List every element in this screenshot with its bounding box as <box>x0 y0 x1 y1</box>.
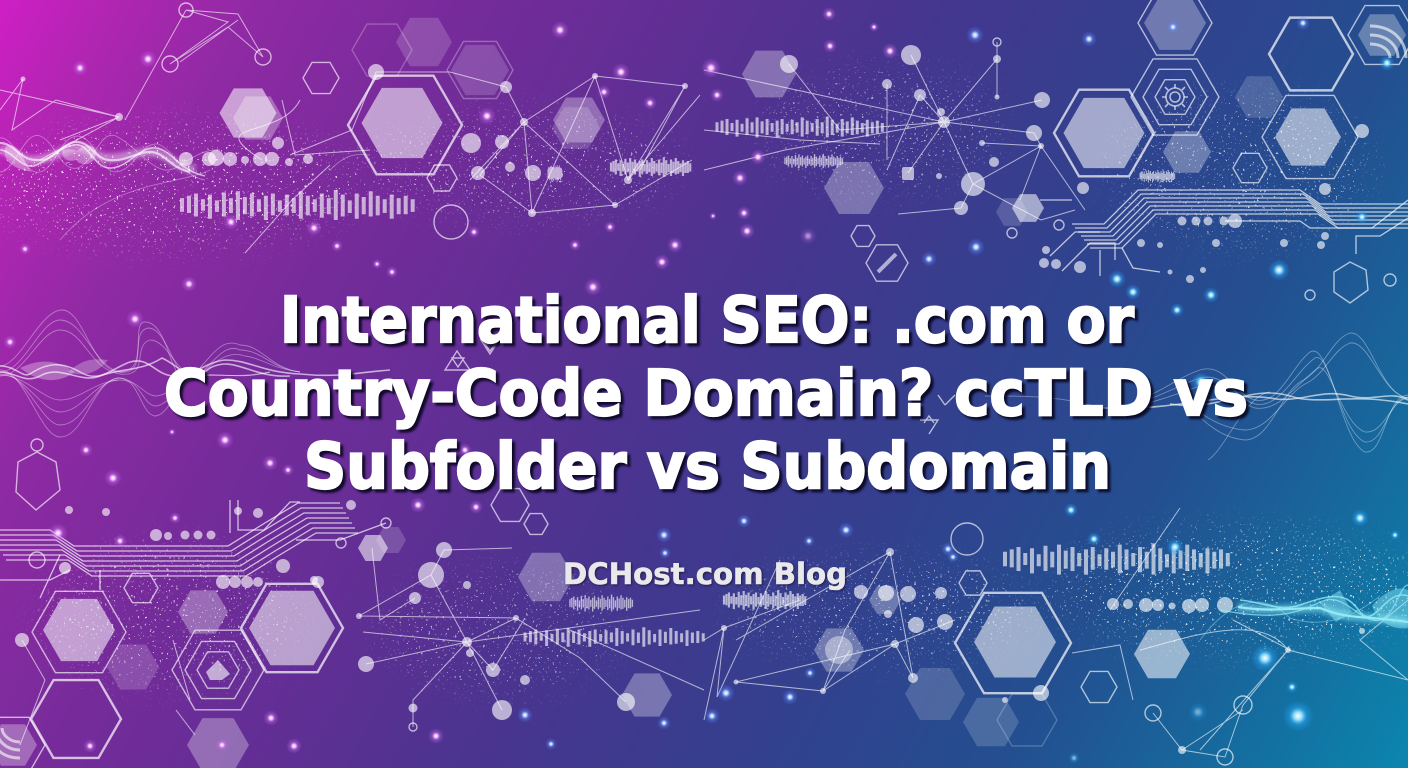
bottom-right energy wave <box>1200 585 1408 640</box>
icon: bottom-left wifi <box>0 728 20 758</box>
title: Subfolder vs Subdomain <box>304 430 1111 503</box>
icon: bottom-left gem <box>206 660 230 680</box>
icon: tool in hexagon <box>878 254 896 272</box>
subtitle: DCHost.com Blog <box>563 557 847 591</box>
left mid sound wave <box>0 310 390 437</box>
top-right network lines <box>704 42 1085 220</box>
top-right hexagons <box>742 0 1408 281</box>
left circuit traces <box>0 500 386 598</box>
icon: wifi signal <box>1370 26 1406 58</box>
glow lights pink <box>3 7 898 754</box>
top-left energy wave <box>0 135 370 240</box>
title: Country-Code Domain? ccTLD vs <box>164 357 1248 430</box>
glow lights blue <box>517 16 1310 750</box>
icon: gear <box>1162 84 1188 110</box>
glow lights cyan <box>1064 55 1400 764</box>
top-left network lines <box>0 10 700 253</box>
icon: triangle marks <box>445 340 955 434</box>
top-left hexagons <box>220 18 605 191</box>
right mid sound wave <box>985 333 1408 460</box>
bottom-left hexagons <box>0 489 672 768</box>
waveform bars <box>182 117 1228 647</box>
bottom-left network lines <box>20 548 704 745</box>
bottom-right hexagons <box>814 571 1190 746</box>
right circuit traces <box>1040 190 1408 276</box>
bottom-right network lines <box>704 508 1408 757</box>
title: International SEO: .com or <box>280 284 1134 357</box>
title <box>164 284 1248 503</box>
